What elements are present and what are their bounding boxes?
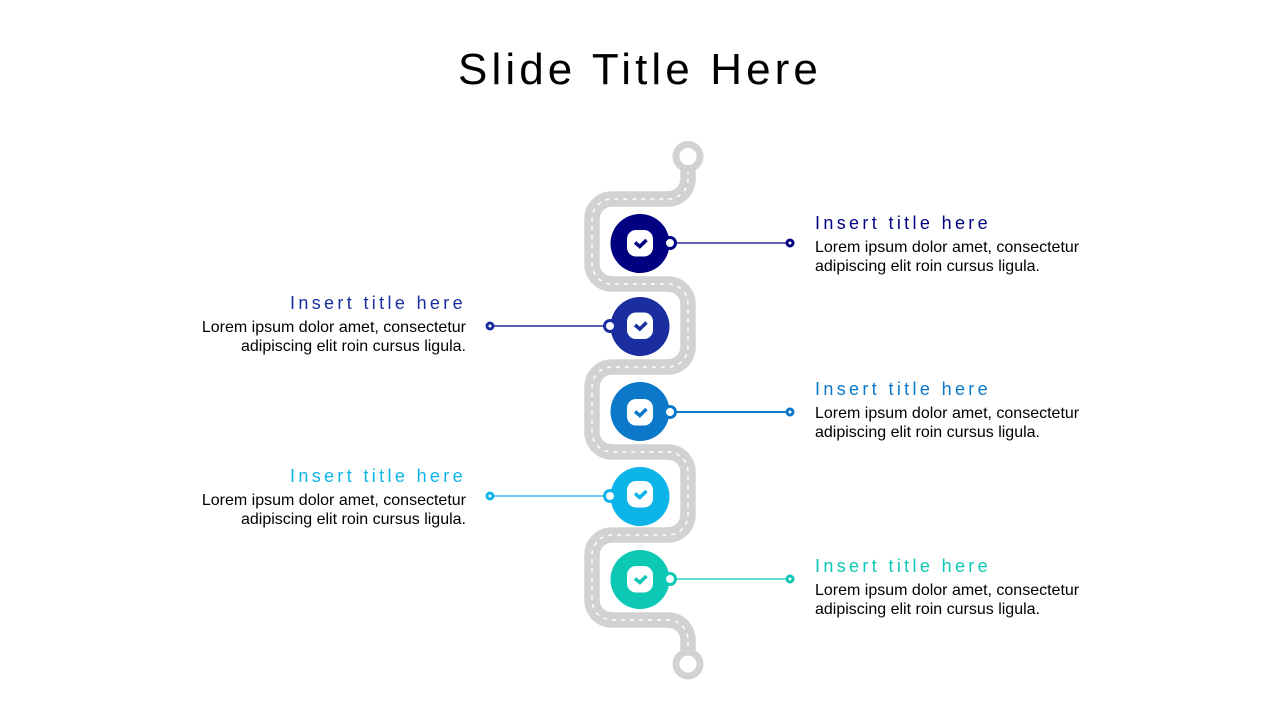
text block 1: Insert title here <box>815 213 991 233</box>
milestone 4 <box>487 467 670 526</box>
text block 3: adipiscing elit roin cursus ligula. <box>815 424 1040 441</box>
milestone 2 <box>487 297 670 356</box>
text block 2: Lorem ipsum dolor amet, consectetur <box>202 319 466 336</box>
text block 4: adipiscing elit roin cursus ligula. <box>241 511 466 528</box>
road end ring <box>676 652 700 676</box>
milestone 5 <box>610 550 793 609</box>
text block 5: Lorem ipsum dolor amet, consectetur <box>815 582 1079 599</box>
text block 4: Insert title here <box>290 466 466 486</box>
winding road <box>592 170 688 650</box>
road start ring <box>676 144 700 168</box>
milestone 1 <box>610 214 793 273</box>
text block 1: Lorem ipsum dolor amet, consectetur <box>815 239 1079 256</box>
milestone 3 <box>610 382 793 441</box>
title: Slide Title Here <box>458 45 822 94</box>
text block 2: adipiscing elit roin cursus ligula. <box>241 338 466 355</box>
text block 2 <box>202 293 466 355</box>
text block 4: Lorem ipsum dolor amet, consectetur <box>202 492 466 509</box>
text block 5: Insert title here <box>815 556 991 576</box>
text block 5: adipiscing elit roin cursus ligula. <box>815 601 1040 618</box>
text block 3: Insert title here <box>815 379 991 399</box>
text block 5 <box>815 556 1079 618</box>
text block 1: adipiscing elit roin cursus ligula. <box>815 258 1040 275</box>
text block 2: Insert title here <box>290 293 466 313</box>
text block 3: Lorem ipsum dolor amet, consectetur <box>815 405 1079 422</box>
text block 4 <box>202 466 466 528</box>
text block 1 <box>815 213 1079 275</box>
text block 3 <box>815 379 1079 441</box>
